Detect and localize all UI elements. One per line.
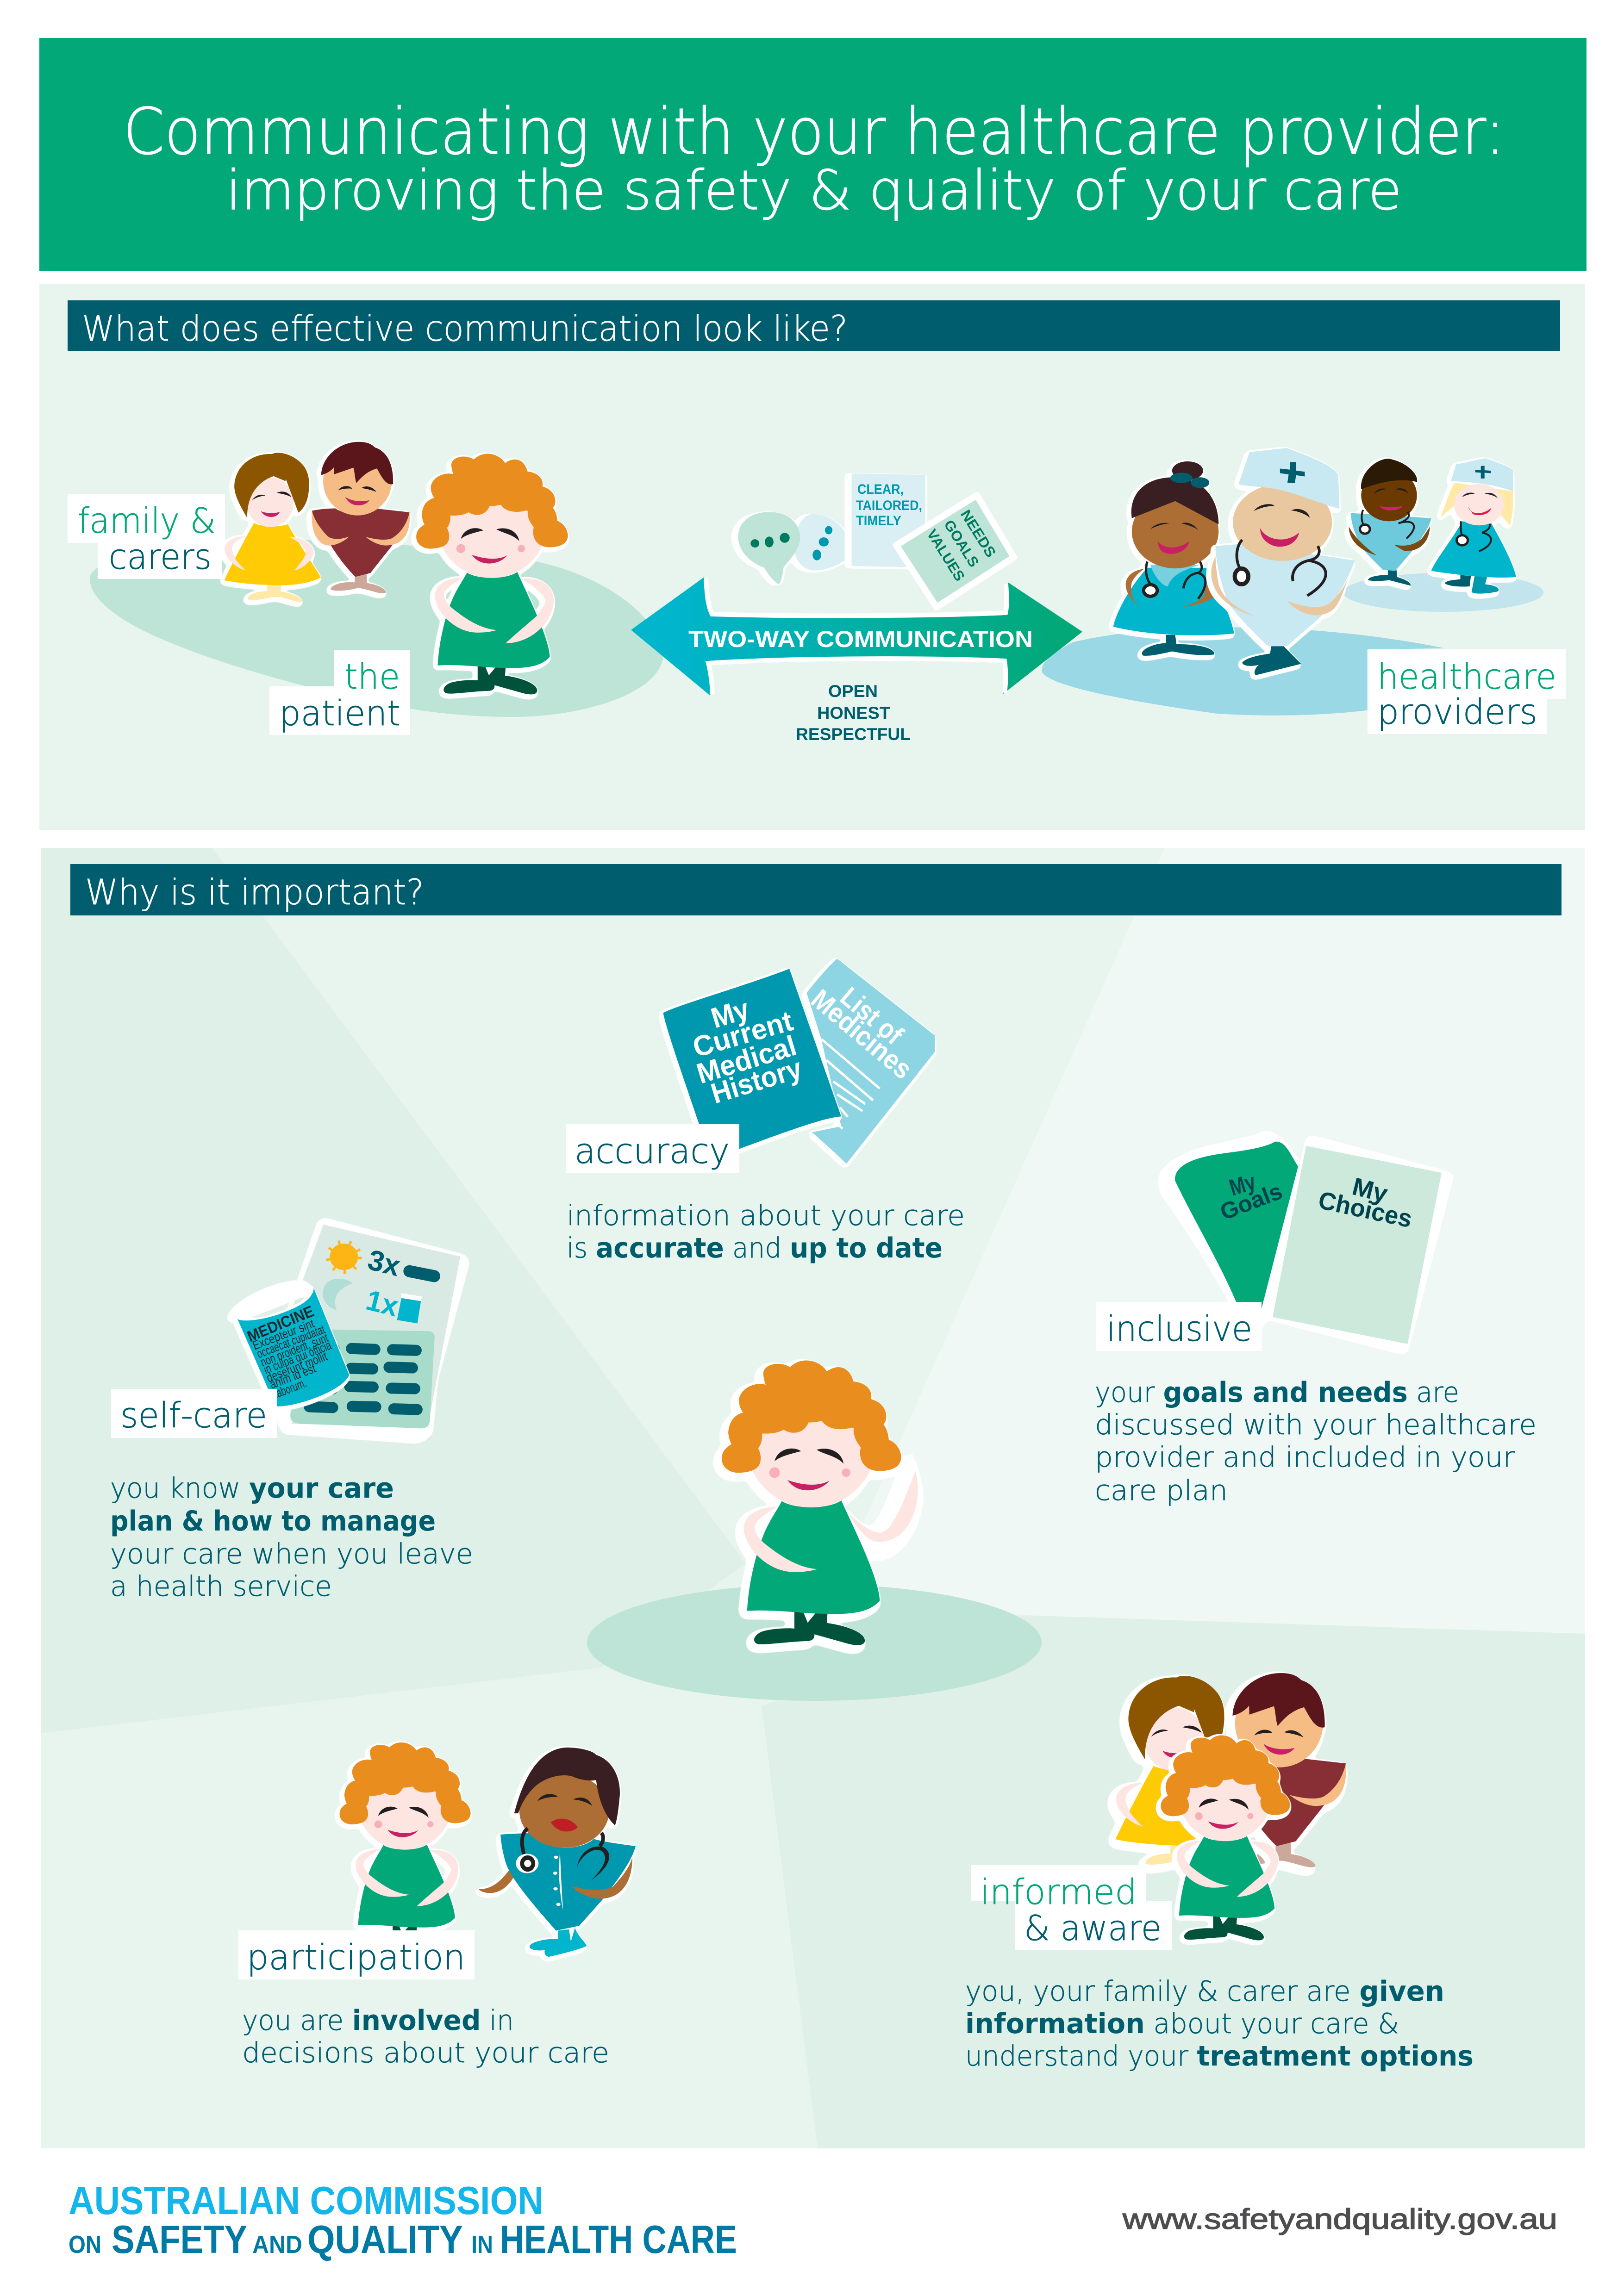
panel: what does effective communication look like [39, 284, 1585, 830]
text: self-care description: you know your care [110, 1472, 394, 1505]
text: informed description: understand your treatment options [965, 2040, 1474, 2072]
section heading bar [68, 300, 1560, 351]
text: list of medicines: List of [835, 981, 909, 1051]
footer logo: Australian Commission: HEALTH CARE [500, 2218, 737, 2262]
label: family and carers [68, 494, 225, 579]
note: needs, goals, values: NEEDS [957, 507, 999, 560]
text: my current medical history [689, 993, 806, 1110]
figure: woman carer in informed [1115, 1676, 1239, 1867]
text: my choices: Choices [1316, 1186, 1415, 1233]
text: medicine bottle label: Excepteur sint [250, 1316, 316, 1353]
text: 3x: 3x [365, 1244, 404, 1282]
figure: man carer in informed [1220, 1673, 1346, 1867]
figure: healthcare provider in participation [479, 1748, 636, 1957]
text: self-care description: your care when you leave [110, 1538, 473, 1570]
text: medicine bottle label: non proident, sunt [258, 1331, 330, 1369]
figure: patient in participation [340, 1742, 471, 1950]
text: my current medical history: History [707, 1052, 806, 1110]
providers front ground blob [1042, 628, 1445, 716]
note: clear, tailored, timely: TAILORED, [856, 498, 922, 513]
icon: medicine bottle [231, 1282, 349, 1406]
text: informed description: information about your care & [965, 2008, 1399, 2040]
text: open, honest, respectful: OPEN [828, 682, 878, 701]
figure: man carer [312, 442, 410, 593]
text: medicine bottle label: laborum. [272, 1376, 308, 1401]
label: family and carers: family & [78, 500, 216, 541]
label: self-care: self-care [120, 1395, 267, 1436]
figure: woman carer [224, 453, 321, 602]
section heading bar: What does effective communication look like? [82, 308, 848, 349]
text: self-care description: a health service [110, 1570, 332, 1603]
footer logo: Australian Commission [69, 2179, 737, 2262]
background wedge: upper left [41, 848, 746, 1733]
background wedge: right [833, 848, 1585, 1634]
label: healthcare providers: providers [1377, 691, 1537, 732]
label: healthcare providers: healthcare [1377, 656, 1556, 697]
text: 1x: 1x [363, 1284, 402, 1323]
label: the patient [269, 650, 410, 735]
text: medicine bottle label: occaecat cupidatat [255, 1322, 327, 1361]
panel: why is it important [41, 848, 1585, 2148]
text: my goals: Goals [1217, 1178, 1286, 1225]
text: medicine bottle label: anim id est [268, 1361, 318, 1392]
text: medicine bottle label: in culpa qui officia [262, 1338, 334, 1377]
footer website url: www.safetyandquality.gov.au [1122, 2203, 1557, 2235]
text: inclusive description: discussed with your healthcare [1095, 1409, 1537, 1441]
icon: my goals folder [1163, 1132, 1299, 1327]
header banner [39, 38, 1587, 271]
label: informed and aware: informed [980, 1872, 1137, 1912]
subtitle: improving the safety & quality of your care [226, 158, 1402, 222]
text: inclusive description: care plan [1095, 1475, 1228, 1507]
text: participation description: decisions about your care [242, 2037, 609, 2069]
text: open, honest, respectful: HONEST [817, 703, 890, 722]
text: my choices: My [1349, 1172, 1390, 1208]
figure: doctor with cap [1211, 448, 1355, 675]
icon: list of medicines paper [806, 958, 935, 1164]
text: inclusive description: provider and included in your [1095, 1441, 1515, 1474]
icon: speech bubbles [738, 512, 865, 584]
text: accuracy description [567, 1200, 965, 1264]
footer logo: Australian Commission: QUALITY [307, 2218, 463, 2262]
text: informed description: you, your family & carer are given [965, 1975, 1444, 2008]
icon: medical history book [663, 969, 841, 1156]
footer logo: Australian Commission: IN [471, 2231, 493, 2259]
label: family and carers: carers [109, 536, 212, 577]
label: participation: participation [247, 1937, 465, 1978]
arrow: two-way communication: TWO-WAY COMMUNICATION [688, 626, 1033, 652]
label: healthcare providers [1368, 649, 1566, 734]
text: list of medicines: Medicines [806, 983, 918, 1085]
note: needs, goals, values: GOALS [941, 517, 982, 570]
note: needs, goals, values [896, 495, 1014, 607]
figure: patient in informed [1161, 1735, 1290, 1941]
footer logo: Australian Commission: SAFETY [112, 2218, 247, 2262]
footer logo: Australian Commission: AUSTRALIAN COMMISSION [69, 2179, 543, 2223]
text: self-care description [110, 1472, 473, 1603]
centre ground ellipse [587, 1584, 1042, 1701]
text: my current medical history: Current [689, 1005, 796, 1064]
footer logo: Australian Commission: ON [69, 2231, 101, 2259]
text: self-care description: plan & how to manage [110, 1505, 436, 1537]
label: the patient: the [344, 656, 400, 697]
text: accuracy description: information about your care [567, 1200, 965, 1232]
patient ground blob [90, 540, 663, 717]
note: clear, tailored, timely: TIMELY [856, 513, 901, 529]
text: participation description: you are involved in [242, 2004, 514, 2037]
figure: dark-skinned nurse, back [1349, 459, 1431, 586]
text: informed description [965, 1975, 1474, 2072]
providers back ground blob [1343, 573, 1543, 612]
text: medicine bottle label [245, 1302, 334, 1401]
text: open, honest, respectful: RESPECTFUL [796, 725, 911, 744]
label: the patient: patient [279, 693, 400, 734]
text: medicine bottle label: deserunt mollit [264, 1349, 329, 1385]
label: inclusive: inclusive [1106, 1308, 1252, 1349]
figure: patient [416, 454, 568, 694]
note: clear, tailored, timely [852, 473, 925, 567]
background wedge: lower right [762, 1615, 1585, 2148]
section heading bar [70, 864, 1562, 915]
note: clear, tailored, timely: CLEAR, [857, 482, 904, 497]
text: my current medical history: My [707, 993, 753, 1034]
icon: care plan chart [282, 1220, 468, 1438]
figure: blonde nurse, back [1431, 458, 1516, 594]
section heading bar: Why is it important? [85, 871, 424, 913]
arrow: two-way communication [631, 577, 1082, 696]
text: my current medical history: Medical [693, 1030, 800, 1090]
text: my goals: My [1226, 1169, 1259, 1201]
title: Communicating with your healthcare provider: [123, 94, 1505, 169]
footer logo: Australian Commission: AND [252, 2231, 302, 2259]
text: inclusive description [1095, 1376, 1537, 1507]
text: medicine bottle label: MEDICINE [245, 1302, 317, 1345]
text: open, honest, respectful [796, 682, 911, 744]
label: accuracy: accuracy [575, 1131, 730, 1171]
label: informed and aware [971, 1865, 1172, 1950]
text: participation description [242, 2004, 609, 2069]
label: informed and aware: & aware [1024, 1908, 1162, 1948]
figure: central patient waving [722, 1361, 922, 1645]
icon: my choices card [1262, 1136, 1453, 1354]
text: inclusive description: your goals and needs are [1095, 1376, 1459, 1409]
note: needs, goals, values: VALUES [924, 526, 968, 584]
figure: nurse with bun [1113, 461, 1234, 656]
text: accuracy description: is accurate and up to date [567, 1232, 943, 1264]
